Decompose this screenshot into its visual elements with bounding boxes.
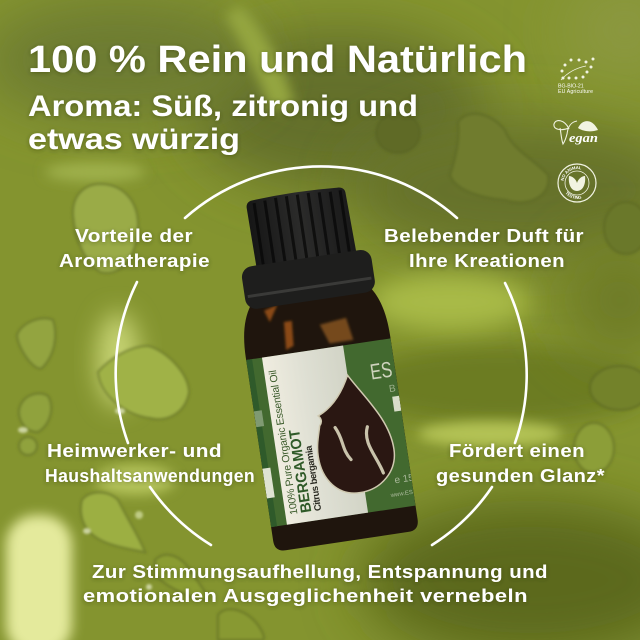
- subtitle: aroma: etwas würzig: [28, 123, 240, 156]
- cap ribs: [254, 188, 349, 264]
- callout: Stimmungsaufhellung: emotionalen Ausgeglichenheit vernebeln: [83, 586, 528, 606]
- green label: [245, 338, 417, 527]
- icon: EU organic leaf: EU Agriculture: [558, 89, 593, 95]
- title: 100 % Rein und Natürlich: [28, 39, 527, 81]
- callout: Belebender Duft: Belebender Duft für: [384, 226, 584, 246]
- left side panel of label: [261, 468, 275, 499]
- label group: [245, 338, 418, 527]
- callout: Heimwerker: Heimwerker- und: [47, 441, 222, 461]
- bottle body: [238, 285, 419, 552]
- icon: EU organic leaf: [558, 58, 594, 95]
- label group: B: [388, 383, 397, 395]
- label text: 100% Pure Organic Essential Oil: [267, 369, 300, 515]
- drop emblem: [307, 370, 400, 498]
- circular arcs around the bottle: [116, 166, 527, 545]
- product bottle: [242, 188, 418, 550]
- subtitle: aroma: [28, 90, 418, 156]
- icon: vegan: egan: [569, 131, 598, 145]
- white label panel: [262, 346, 368, 525]
- callout: Belebender Duft: Ihre Kreationen: [409, 251, 565, 271]
- callout: Fördert einen gesunden Glanz: [436, 441, 605, 486]
- collar: [240, 248, 376, 310]
- callout: Heimwerker: [45, 441, 255, 486]
- callout: Vorteile der Aromatherapie: Aromatherapie: [59, 251, 210, 271]
- icon: no animal testing: TESTING: [566, 191, 582, 199]
- glass reflections: [263, 294, 353, 352]
- subtitle: aroma: Aroma: Süß, zitronig und: [28, 90, 418, 123]
- water highlights: [18, 408, 152, 590]
- callout: Heimwerker: Haushaltsanwendungen: [45, 466, 255, 486]
- product bottle: BERGAMOT: [286, 428, 315, 514]
- cap: [245, 185, 357, 272]
- callout: Vorteile der Aromatherapie: [59, 226, 210, 271]
- callout: Belebender Duft: [384, 226, 584, 271]
- callout: Fördert einen gesunden Glanz: gesunden Glanz*: [436, 466, 605, 486]
- label group: www.ES: [389, 490, 413, 499]
- icon: EU organic leaf: BG-BIO-21: [558, 84, 584, 90]
- product bottle: Citrus bergamia: [303, 444, 324, 512]
- callout: Stimmungsaufhellung: [83, 562, 548, 606]
- brand text on side: ES: [368, 357, 394, 385]
- label group: e 15: [394, 472, 415, 486]
- icon: no animal testing: [557, 163, 597, 203]
- icon: vegan: [554, 121, 598, 145]
- callout: Vorteile der Aromatherapie: Vorteile der: [75, 226, 193, 246]
- icon: no animal testing: NO ANIMAL: [560, 166, 582, 181]
- callout: Fördert einen gesunden Glanz: Fördert einen: [449, 441, 585, 461]
- callout: Stimmungsaufhellung: Zur Stimmungsaufhellung, Entspannung und: [92, 562, 548, 582]
